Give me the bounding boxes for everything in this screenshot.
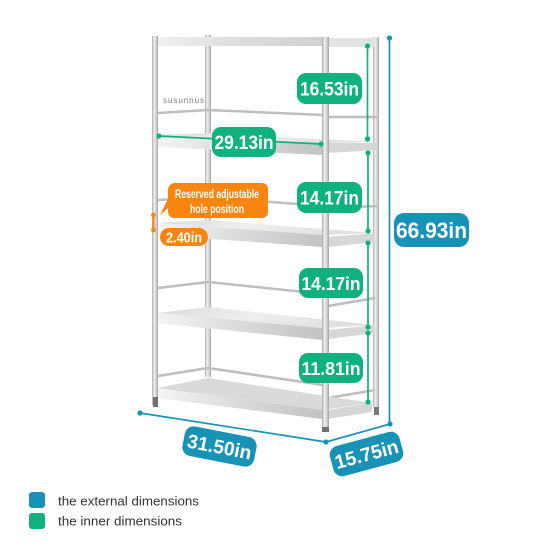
- shelf unit: [152, 35, 379, 432]
- shelf 2: [157, 133, 377, 155]
- legend: inner dimensions: the inner dimensions: [58, 514, 183, 528]
- brand text: susunnus: [163, 96, 204, 105]
- label: 16.53in: [297, 73, 362, 104]
- callout: reserved adjustable hole position: hole position: [190, 202, 244, 216]
- label: 29.13in: [212, 127, 276, 157]
- label: 66.93in: 66.93in: [396, 218, 467, 243]
- front posts: [152, 36, 329, 432]
- inner dimension lines: [156, 43, 371, 405]
- label: 16.53in: 16.53in: [300, 78, 359, 100]
- label: 15.75in: 15.75in: [333, 436, 401, 474]
- callout: reserved adjustable hole position: Reserved adjustable: [175, 187, 259, 201]
- legend: external dimensions: the external dimensions: [58, 494, 200, 508]
- shelf 5: [157, 378, 372, 419]
- external dimension lines: [137, 35, 393, 445]
- label: 2.40in: 2.40in: [166, 230, 202, 246]
- legend: [29, 492, 200, 529]
- shelf 3: [157, 220, 375, 247]
- label: 11.81in: [299, 353, 363, 383]
- label: 31.50in: 31.50in: [185, 430, 253, 464]
- top frame band: [157, 37, 375, 47]
- callout: reserved adjustable hole position: [160, 183, 268, 218]
- label: 11.81in: 11.81in: [302, 358, 360, 379]
- orange hole position marker: [151, 213, 156, 232]
- rails: [158, 110, 377, 398]
- label: 14.17in upper: 14.17in: [300, 188, 359, 210]
- back posts: [205, 35, 379, 415]
- label: 14.17in upper: [297, 182, 362, 213]
- shelf 4: [157, 307, 375, 340]
- label: 29.13in: 29.13in: [214, 132, 274, 154]
- label: 14.17in lower: 14.17in: [302, 273, 360, 294]
- label: 14.17in lower: [299, 268, 363, 298]
